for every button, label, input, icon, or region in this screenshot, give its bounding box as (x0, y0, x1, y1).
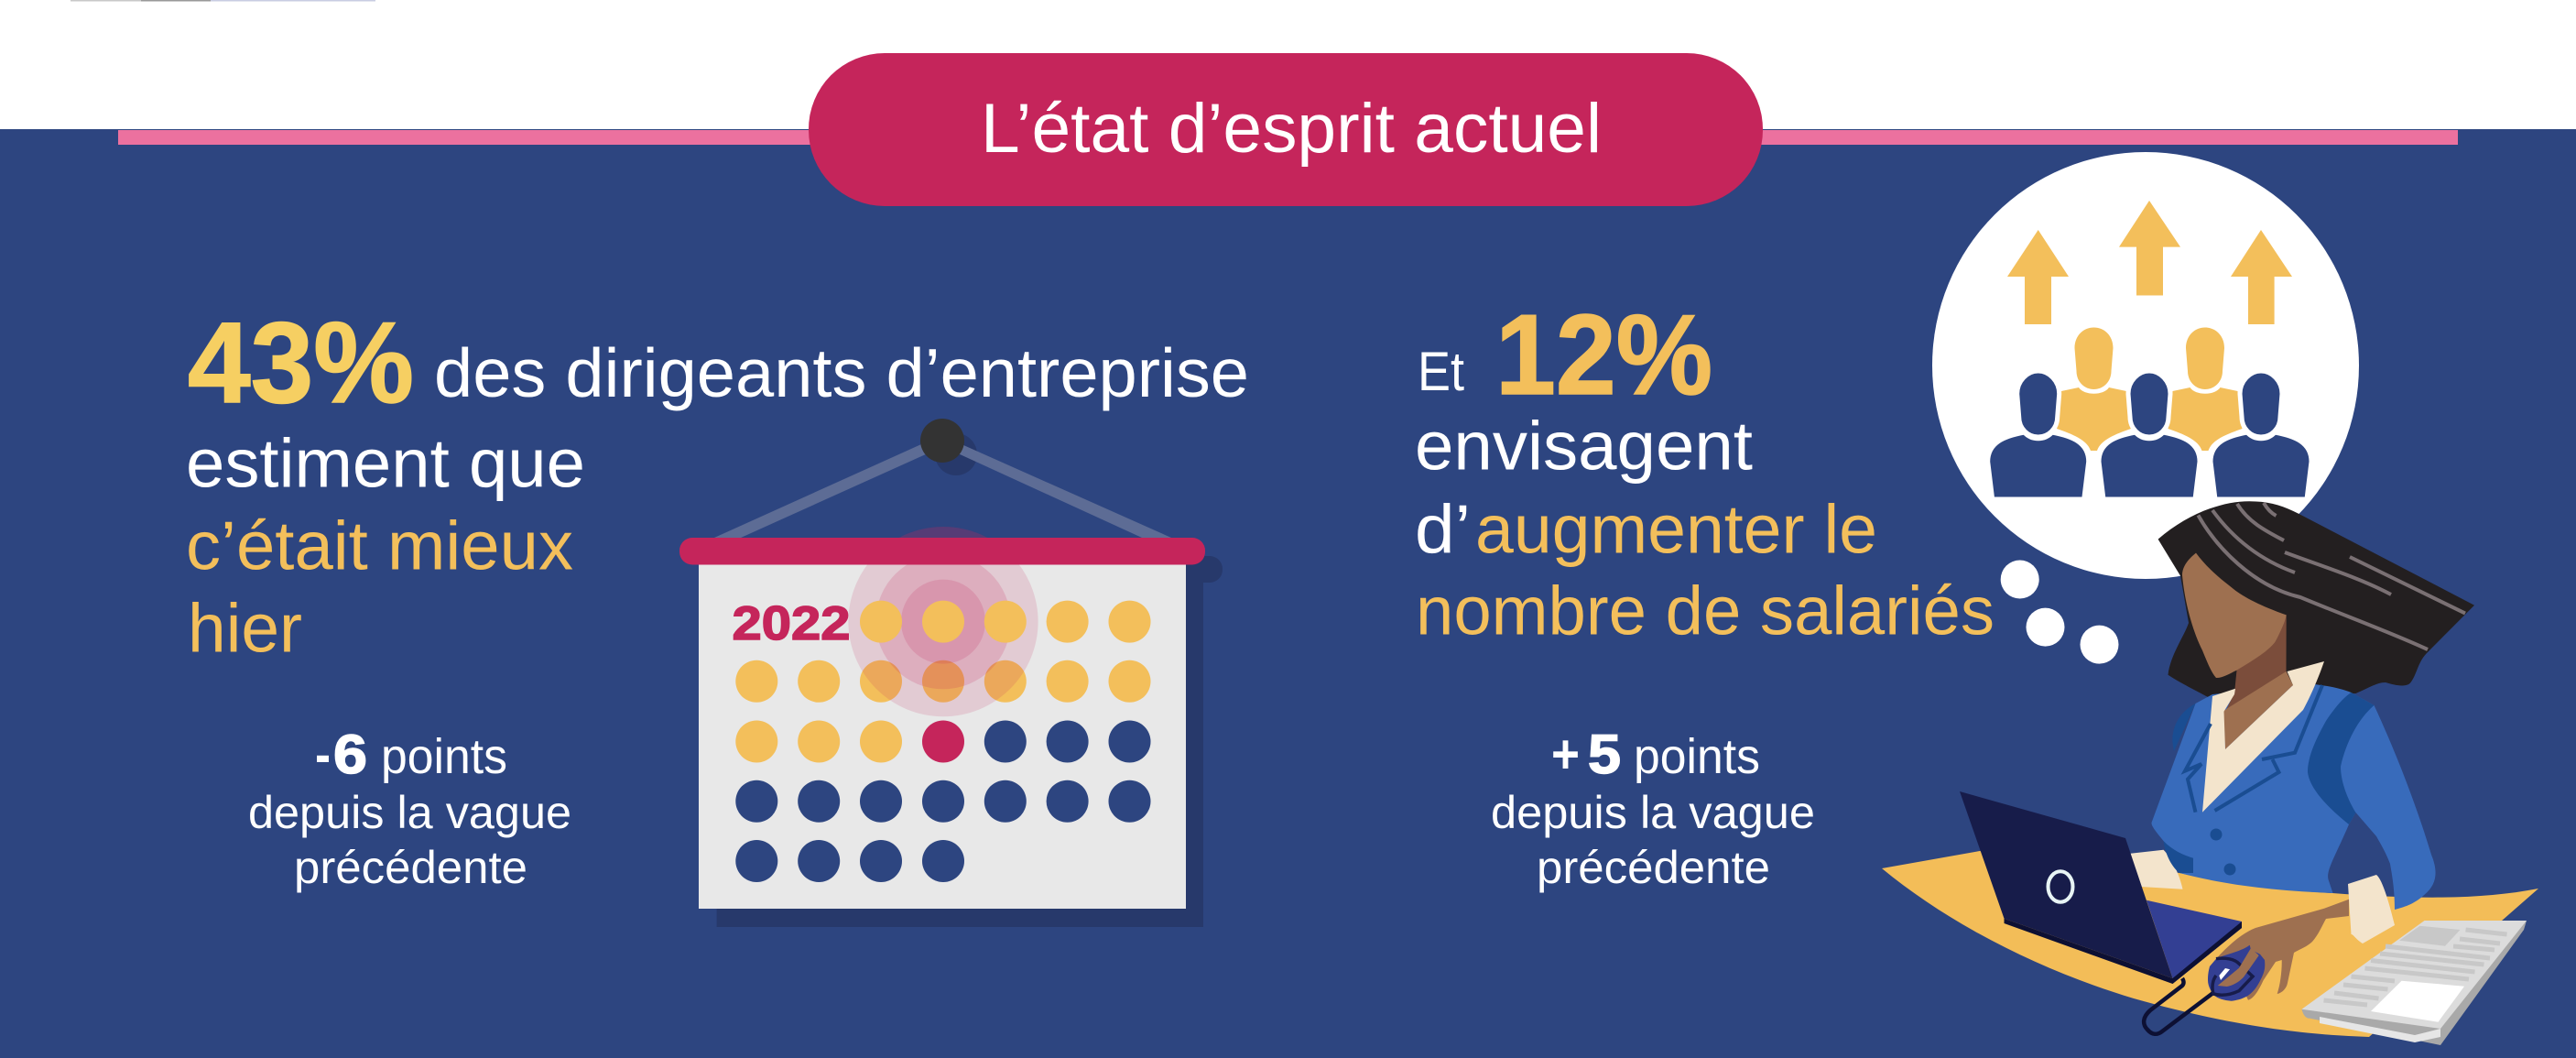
jacket (2152, 684, 2436, 910)
calendar illustration (679, 419, 1223, 927)
right change note (1491, 724, 1815, 893)
jacket shadows (2163, 693, 2374, 873)
left change note: - (315, 724, 331, 785)
mouse cable (2144, 978, 2214, 1034)
hair (2158, 501, 2474, 699)
left statistic text: c’était mieux (186, 507, 573, 584)
right statistic text (1415, 292, 1994, 649)
right statistic text: augmenter le (1475, 491, 1877, 568)
calendar top bar (679, 538, 1205, 564)
left statistic text: estiment que (186, 425, 585, 502)
laptop (1960, 791, 2242, 984)
left change note: précédente (294, 842, 527, 893)
date dots rows 4 and 5 (735, 780, 1150, 882)
left change note (248, 724, 571, 893)
lapels (2185, 685, 2322, 813)
date dots row 2 (735, 660, 1150, 703)
right statistic text: nombre de salariés (1416, 572, 1994, 649)
left cuff (2130, 850, 2183, 889)
newspaper (2302, 921, 2527, 1045)
top edge strip (71, 0, 375, 2)
chest (2223, 671, 2293, 749)
businesswoman at desk illustration (1882, 501, 2538, 1045)
hair strands (2198, 503, 2465, 649)
shirt collar (2202, 661, 2324, 813)
target glow rings (848, 527, 1038, 716)
right statistic text: d’ (1415, 491, 1471, 568)
left change note: depuis la vague (248, 787, 571, 838)
left change note: points (381, 729, 507, 784)
right statistic text: 12% (1495, 292, 1712, 419)
calendar paper (699, 564, 1186, 909)
left statistic text: hier (188, 590, 302, 667)
front row people (1988, 371, 2311, 499)
glow outer behind bar (848, 527, 1038, 716)
back row people (2057, 328, 2242, 451)
face (2182, 553, 2287, 678)
right statistic text: envisagent (1415, 407, 1753, 484)
right change note: points (1634, 729, 1760, 784)
date dots row 1 (860, 601, 1150, 643)
right statistic text: Et (1418, 341, 1464, 402)
hand (2216, 900, 2349, 1000)
mouse (2208, 945, 2265, 1001)
calendar nail (920, 419, 964, 463)
date dots row 3 (735, 720, 1150, 762)
growth arrows (2007, 201, 2292, 324)
bubble (1932, 152, 2359, 664)
right change note: depuis la vague (1491, 787, 1815, 838)
right change note: 5 (1588, 724, 1621, 785)
index finger (2218, 948, 2259, 987)
desk (1882, 851, 2538, 1037)
title pill (809, 53, 1763, 206)
neck (2225, 615, 2293, 712)
right cuff (2348, 875, 2395, 943)
title pill: L’état d’esprit actuel (981, 90, 1602, 168)
calendar shadow (717, 433, 1223, 927)
left change note: 6 (333, 724, 367, 785)
hanging strings (714, 444, 1171, 538)
calendar year: 2022 (733, 597, 850, 650)
right change note: précédente (1537, 842, 1770, 893)
pink header rule (118, 130, 2458, 145)
left statistic text: des dirigeants d’entreprise (434, 334, 1249, 411)
jacket buttons (2211, 828, 2236, 876)
left statistic text: 43% (188, 300, 414, 427)
left statistic text (186, 300, 1249, 667)
thought bubble with people and arrows (1932, 152, 2359, 664)
right change note: + (1551, 724, 1580, 785)
